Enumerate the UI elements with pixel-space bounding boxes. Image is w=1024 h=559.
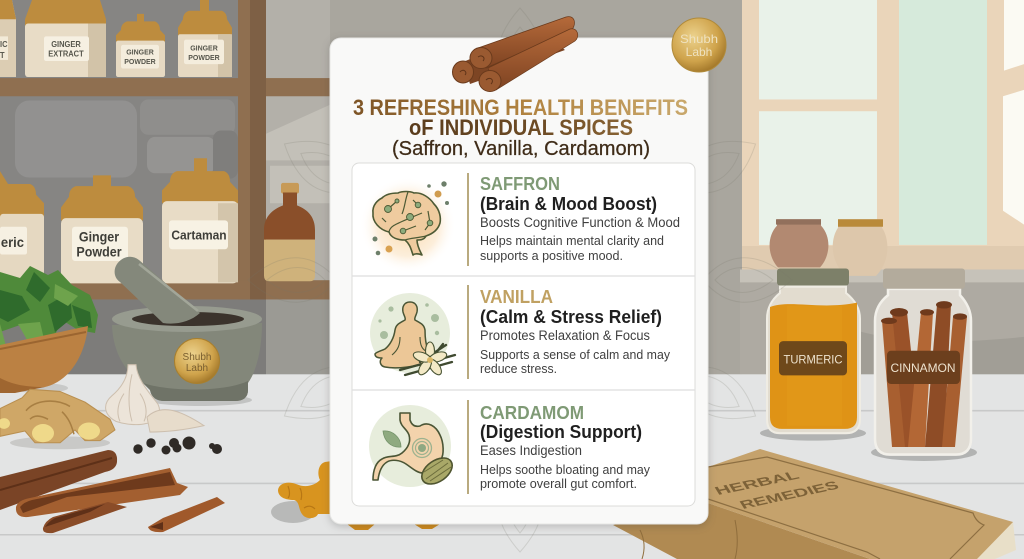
jar: cartaman: Cartaman bbox=[171, 228, 227, 243]
jar: ginger powder large: Ginger bbox=[79, 229, 119, 245]
jar: turmeric partial bbox=[0, 171, 44, 282]
text: vanilla: VANILLA bbox=[480, 287, 553, 307]
jar: ginger powder 1 bbox=[116, 14, 165, 77]
text: saffron: SAFFRON bbox=[480, 174, 560, 194]
jar: partial left bbox=[0, 0, 16, 77]
jar: partial left: T bbox=[0, 51, 5, 60]
jar: partial left: IC bbox=[0, 40, 8, 49]
benefits panel bbox=[352, 163, 695, 506]
text: saffron: Helps maintain mental clarity and bbox=[480, 233, 664, 248]
cardamom section bbox=[369, 403, 650, 491]
gold badge on mortar bbox=[174, 338, 220, 384]
jar: ginger extract: GINGER bbox=[51, 40, 81, 49]
vanilla section bbox=[370, 287, 670, 377]
mandala watermark bbox=[248, 8, 792, 552]
jar: ginger powder 2: POWDER bbox=[188, 53, 220, 62]
text: saffron: (Brain & Mood Boost) bbox=[480, 193, 657, 214]
herbal remedies book: HERBAL bbox=[712, 468, 802, 497]
icon: brain bbox=[360, 177, 456, 273]
icon: cinnamon bundle bbox=[452, 17, 578, 92]
herbal remedies book bbox=[613, 449, 1016, 559]
garlic bbox=[106, 365, 204, 432]
title: oF INDIVIDUAL SPICES bbox=[409, 115, 633, 140]
turmeric jar bbox=[760, 268, 866, 441]
jar: ginger extract: EXTRACT bbox=[48, 49, 84, 59]
gold badge: Shubh bbox=[680, 32, 718, 46]
stone wall behind shelves bbox=[0, 0, 330, 374]
title: (Saffron, Vanilla, Cardamom) bbox=[392, 138, 650, 160]
herb bowl bbox=[0, 266, 98, 393]
jar: turmeric partial: eric bbox=[1, 235, 24, 250]
table bbox=[0, 374, 1024, 559]
text: vanilla bbox=[480, 287, 670, 376]
main card bbox=[330, 17, 726, 524]
mortar and pestle bbox=[112, 257, 262, 406]
title bbox=[353, 95, 688, 160]
cinnamon jar: CINNAMON bbox=[890, 361, 955, 375]
jar: ginger powder 1: POWDER bbox=[124, 57, 156, 66]
ginger root bbox=[0, 389, 115, 449]
text: cardamom bbox=[480, 403, 650, 491]
jar: ginger powder 2 bbox=[178, 0, 232, 77]
cinnamon jar bbox=[871, 268, 977, 461]
text: saffron: Boosts Cognitive Function & Mood bbox=[480, 215, 680, 230]
icon: stomach with cardamom bbox=[369, 405, 457, 489]
text: vanilla: (Calm & Stress Relief) bbox=[480, 306, 662, 327]
jar: ginger powder 2: GINGER bbox=[190, 43, 219, 52]
title: 3 REFRESHING HEALTH BENEFITS bbox=[353, 95, 688, 120]
saffron section bbox=[360, 174, 680, 273]
jar: ginger extract bbox=[25, 0, 106, 77]
text: cardamom: CARDAMOM bbox=[480, 403, 584, 423]
gold badge on mortar: Shubh bbox=[183, 352, 211, 363]
turmeric pieces bbox=[271, 461, 440, 530]
text: cardamom: Eases Indigestion bbox=[480, 443, 582, 458]
window bbox=[708, 0, 1024, 374]
peppercorns bbox=[133, 436, 222, 454]
clay pots on sill bbox=[770, 219, 887, 276]
jar: ginger powder large bbox=[61, 175, 143, 283]
ginger and garlic bbox=[0, 365, 204, 449]
icon: meditating figure with vanilla bbox=[370, 293, 455, 377]
background wall bbox=[0, 0, 1024, 374]
lower shelf jars bbox=[0, 158, 315, 283]
gold badge on mortar: Labh bbox=[186, 363, 208, 374]
text: vanilla: reduce stress. bbox=[480, 361, 557, 376]
text: saffron: supports a positive mood. bbox=[480, 248, 623, 263]
jar: cartaman bbox=[162, 158, 238, 283]
text: cardamom: promote overall gut comfort. bbox=[480, 476, 637, 491]
text: saffron bbox=[480, 174, 680, 263]
gold badge bbox=[672, 18, 726, 72]
herbal remedies book: REMEDIES bbox=[737, 478, 842, 511]
text: cardamom: Helps soothe bloating and may bbox=[480, 462, 650, 477]
jar: ginger powder 1: GINGER bbox=[126, 47, 155, 57]
text: vanilla: Supports a sense of calm and may bbox=[480, 347, 670, 362]
wooden shelves bbox=[0, 0, 330, 299]
text: cardamom: (Digestion Support) bbox=[480, 421, 642, 442]
cinnamon sticks on table bbox=[0, 450, 225, 533]
bottle bbox=[264, 183, 315, 281]
text: vanilla: Promotes Relaxation & Focus bbox=[480, 328, 650, 343]
top shelf jars bbox=[0, 0, 232, 77]
jar: ginger powder large: Powder bbox=[76, 244, 122, 260]
gold badge: Labh bbox=[686, 45, 712, 59]
turmeric jar: TURMERIC bbox=[784, 352, 843, 367]
